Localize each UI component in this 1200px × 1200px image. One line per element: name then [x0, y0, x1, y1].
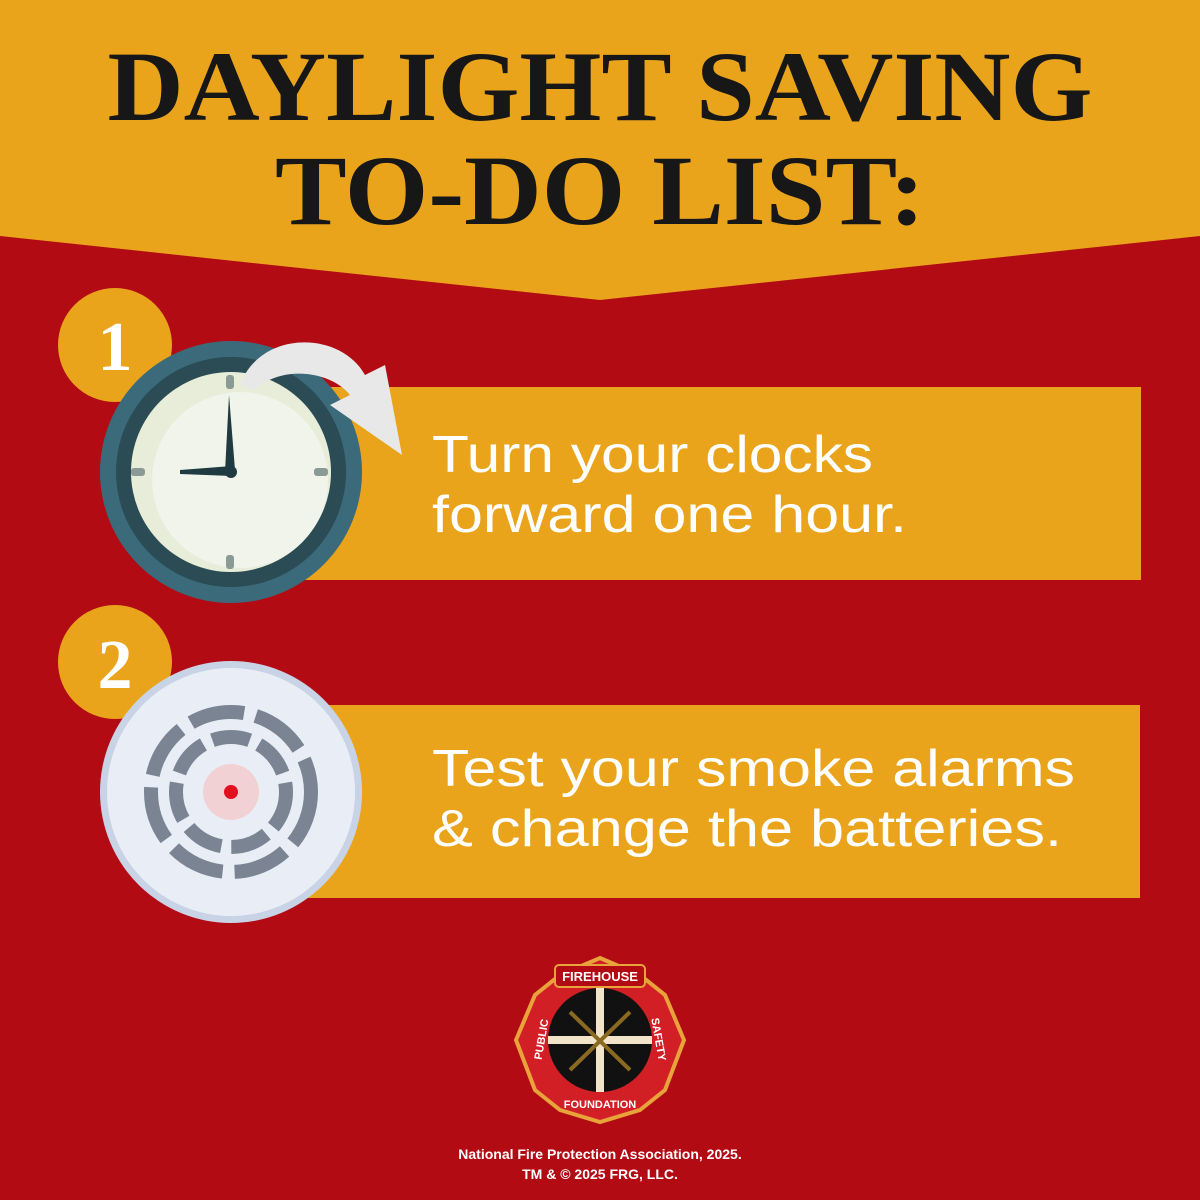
- logo: FIREHOUSE: [562, 969, 638, 984]
- title: DAYLIGHT SAVING: [108, 31, 1092, 142]
- step 2 bar: & change the batteries.: [432, 800, 1062, 858]
- icon: smoke alarm: [100, 661, 362, 923]
- footer credits: TM & © 2025 FRG, LLC.: [522, 1166, 678, 1182]
- number badge 2: [58, 605, 172, 719]
- footer credits: National Fire Protection Association, 2025.: [458, 1146, 742, 1162]
- arrow: [240, 342, 402, 455]
- footer credits: [458, 1146, 742, 1182]
- logo: FOUNDATION: [564, 1099, 636, 1111]
- header banner: [0, 0, 1200, 300]
- logo: PUBLIC: [533, 1018, 552, 1061]
- title: TO-DO LIST:: [275, 135, 925, 246]
- step 1 bar: [290, 387, 1141, 580]
- logo: [516, 958, 684, 1122]
- step 2 bar: [290, 705, 1140, 898]
- number badge 1: [58, 288, 172, 402]
- number badge 1: 1: [98, 309, 132, 386]
- logo: SAFETY: [648, 1017, 668, 1063]
- step 1 bar: Turn your clocks: [432, 426, 873, 484]
- icon: clock: [100, 341, 402, 603]
- number badge 2: 2: [98, 627, 132, 704]
- title: [108, 31, 1092, 246]
- step 1 bar: forward one hour.: [432, 486, 907, 544]
- step 2 bar: Test your smoke alarms: [432, 740, 1075, 798]
